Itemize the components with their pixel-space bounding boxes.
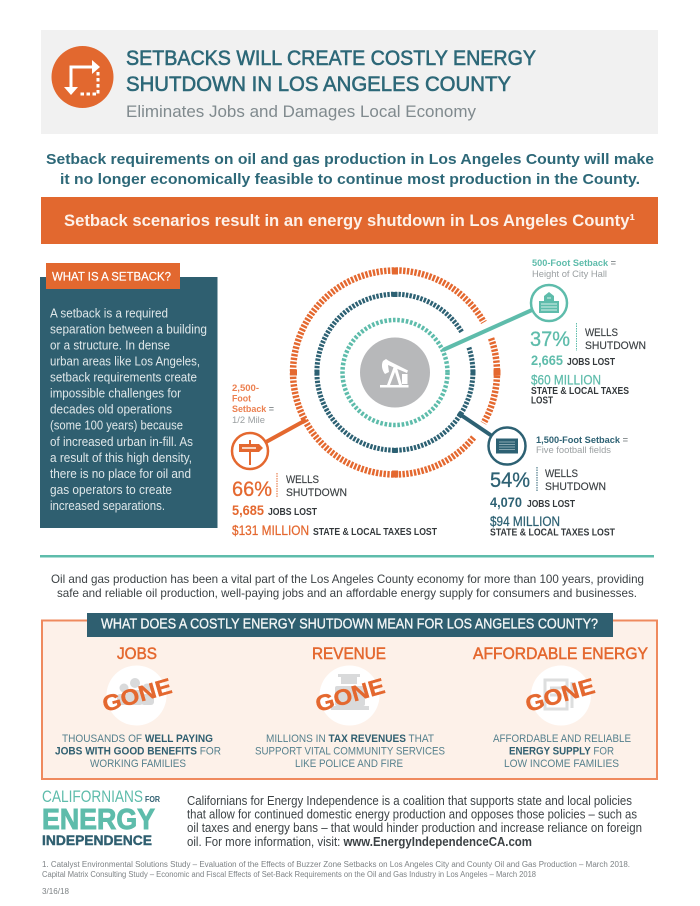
title: SETBACKS WILL CREATE COSTLY ENERGY — [126, 46, 536, 70]
economy paragraph: safe and reliable oil production, well-paying jobs and an affordable energy supply for consumers and businesses. — [57, 586, 637, 600]
scenario: 1500-foot setback: $94 MILLION — [490, 514, 560, 529]
scenario: 2500-foot setback: WELLS — [286, 474, 319, 486]
scenario: 1500-foot setback: JOBS LOST — [527, 499, 575, 510]
scenario: 1500-foot setback: SHUTDOWN — [545, 481, 606, 493]
scenario: 500-foot setback: STATE & LOCAL TAXES — [531, 386, 629, 397]
jobs description: JOBS WITH GOOD BENEFITS FOR — [55, 746, 221, 758]
column: revenue: REVENUE — [312, 645, 386, 663]
column: jobs: JOBS — [117, 645, 157, 663]
heading tag: WHAT IS A SETBACK? — [52, 270, 171, 284]
column: affordable energy — [473, 645, 648, 770]
connector: teal — [443, 310, 532, 350]
label — [232, 383, 274, 426]
energy description: AFFORDABLE AND RELIABLE — [493, 733, 631, 745]
setback definition: A setback is a required — [50, 306, 168, 320]
scenario: 1500-foot setback: WELLS — [545, 468, 578, 480]
header panel — [41, 30, 658, 134]
coalition description: Californians for Energy Independence is a coalition that supports state and local policies — [187, 794, 632, 808]
stat: 54% — [490, 469, 530, 492]
scenario: 1500-foot setback: 4,070 — [490, 495, 522, 510]
scenario: 2500-foot setback: SHUTDOWN — [286, 487, 347, 499]
connector: orange — [266, 420, 306, 442]
icon: setback arrows — [52, 46, 114, 108]
stat: 37% — [530, 328, 570, 351]
footnotes: 1. Catalyst Environmental Solutions Study – Evaluation of the Effects of Buzzer Zone Setbacks on Los Angeles City and County Oil and Gas Production – March 2018. — [42, 860, 630, 869]
scenario: 500-foot setback: JOBS LOST — [567, 357, 615, 368]
revenue description: LIKE POLICE AND FIRE — [295, 758, 403, 770]
intro statement: Setback requirements on oil and gas production in Los Angeles County will make — [46, 151, 654, 168]
connector: dark — [458, 413, 492, 436]
panel heading — [87, 613, 613, 637]
label: 1,500-Foot Setback = — [536, 435, 628, 446]
column: jobs — [55, 645, 221, 770]
scenario: 2500-foot setback: 5,685 — [232, 503, 264, 518]
banner: Setback scenarios result in an energy shutdown in Los Angeles County¹ — [64, 211, 635, 230]
jobs description — [55, 733, 221, 770]
column: revenue — [255, 645, 445, 770]
revenue description: MILLIONS IN TAX REVENUES THAT — [266, 733, 434, 745]
icon: fuel pump gone: GONE — [522, 673, 598, 717]
label — [532, 258, 616, 280]
icon: people gone: GONE — [99, 673, 175, 717]
economy paragraph — [51, 572, 644, 600]
intro statement — [46, 151, 654, 188]
panel heading: WHAT DOES A COSTLY ENERGY SHUTDOWN MEAN FOR LOS ANGELES COUNTY? — [101, 616, 598, 632]
icon: cash register gone — [312, 666, 388, 726]
logo: californians for energy independence: INDEPENDENCE — [42, 832, 152, 848]
coalition description: oil. For more information, visit: www.EnergyIndependenceCA.com — [187, 835, 532, 849]
scenario: 500-foot setback: WELLS — [585, 327, 618, 339]
label — [536, 435, 628, 456]
title — [126, 46, 536, 96]
logo: californians for energy independence: ENERGY — [42, 804, 155, 836]
footnotes — [42, 860, 630, 879]
title: SHUTDOWN IN LOS ANGELES COUNTY — [126, 72, 511, 96]
concentric setback rings chart — [266, 268, 532, 478]
scenario: 500-foot setback: SHUTDOWN — [585, 340, 646, 352]
setback definition — [50, 306, 207, 513]
icon: people gone — [99, 666, 175, 726]
date: 3/16/18 — [42, 887, 70, 896]
label: Height of City Hall — [532, 269, 607, 280]
subtitle: Eliminates Jobs and Damages Local Economy — [126, 103, 477, 121]
scenario: 500-foot setback — [530, 258, 646, 406]
scenario: 2500-foot setback: STATE & LOCAL TAXES LOST — [313, 527, 437, 538]
energy description — [493, 733, 631, 770]
logo: californians for energy independence: CALIFORNIANS — [42, 788, 143, 806]
jobs description: WORKING FAMILIES — [90, 758, 186, 770]
setback definition: decades old operations — [50, 402, 172, 417]
dark ring 1500 ft — [314, 292, 476, 453]
scenario: 1500-foot setback — [488, 428, 628, 538]
scenario: 500-foot setback: LOST — [531, 396, 553, 406]
logo: californians for energy independence: FOR — [145, 795, 160, 804]
setback definition: impossible challenges for — [50, 386, 182, 401]
scenario: 500-foot setback: $60 MILLION — [531, 372, 601, 388]
label: 1/2 Mile — [232, 415, 265, 426]
icon: pump jack — [360, 338, 430, 408]
orange ring 2500 ft — [290, 268, 500, 478]
setback definition: (some 100 years) because — [50, 418, 183, 433]
scenario: 2500-foot setback — [232, 383, 437, 538]
label: Setback = — [232, 404, 274, 415]
setback definition: or a structure. In dense — [50, 338, 170, 352]
intro statement: it no longer economically feasible to continue most production in the County. — [60, 171, 640, 188]
scenario: 500-foot setback: 2,665 — [531, 353, 563, 368]
heading tag — [46, 263, 180, 289]
setback definition: a result of this high density, — [50, 450, 192, 465]
panel: what a shutdown means — [42, 613, 657, 779]
scenario: 1500-foot setback: STATE & LOCAL TAXES LOST — [490, 528, 615, 538]
icon: city hall — [531, 285, 567, 321]
icon: road sign — [232, 433, 268, 469]
setback definition: of increased urban in-fill. As — [50, 434, 193, 449]
teal ring 500 ft — [342, 320, 448, 425]
icon: football field — [488, 428, 526, 464]
stat: 66% — [232, 478, 272, 501]
jobs description: THOUSANDS OF WELL PAYING — [62, 733, 213, 745]
label: Five football fields — [536, 445, 611, 456]
setback definition: setback requirements create — [50, 370, 197, 384]
label: 500-Foot Setback = — [532, 258, 616, 269]
icon: fuel pump gone — [522, 666, 598, 726]
column: affordable energy: AFFORDABLE ENERGY — [473, 645, 648, 663]
coalition description: oil taxes and energy bans – that would hinder production and increase reliance on foreign — [187, 821, 642, 835]
footnotes: Capital Matrix Consulting Study – Economic and Fiscal Effects of Set-Back Requirements on the Oil and Gas Industry in Los Angeles – March 2018 — [42, 870, 537, 879]
logo: californians for energy independence — [42, 788, 160, 848]
setback definition: increased separations. — [50, 498, 165, 513]
revenue description: SUPPORT VITAL COMMUNITY SERVICES — [255, 746, 445, 758]
setback definition: urban areas like Los Angeles, — [50, 354, 200, 368]
setback definition: separation between a building — [50, 322, 207, 336]
energy description: LOW INCOME FAMILIES — [504, 758, 619, 770]
setback definition: gas operators to create — [50, 482, 172, 497]
energy description: ENERGY SUPPLY FOR — [509, 746, 614, 758]
label: Foot — [232, 394, 252, 404]
revenue description — [255, 733, 445, 770]
scenario: 2500-foot setback: JOBS LOST — [268, 507, 317, 518]
label: 2,500- — [232, 383, 259, 394]
icon: cash register gone: GONE — [312, 673, 388, 717]
banner — [41, 197, 658, 244]
coalition description — [187, 794, 642, 849]
economy paragraph: Oil and gas production has been a vital part of the Los Angeles County economy for more than 100 years, providing — [51, 572, 644, 586]
coalition description: that allow for continued domestic energy production and opposes those policies – such as — [187, 808, 637, 822]
panel: what is a setback — [40, 263, 218, 528]
setback definition: there is no place for oil and — [50, 466, 191, 481]
scenario: 2500-foot setback: $131 MILLION — [232, 523, 309, 538]
